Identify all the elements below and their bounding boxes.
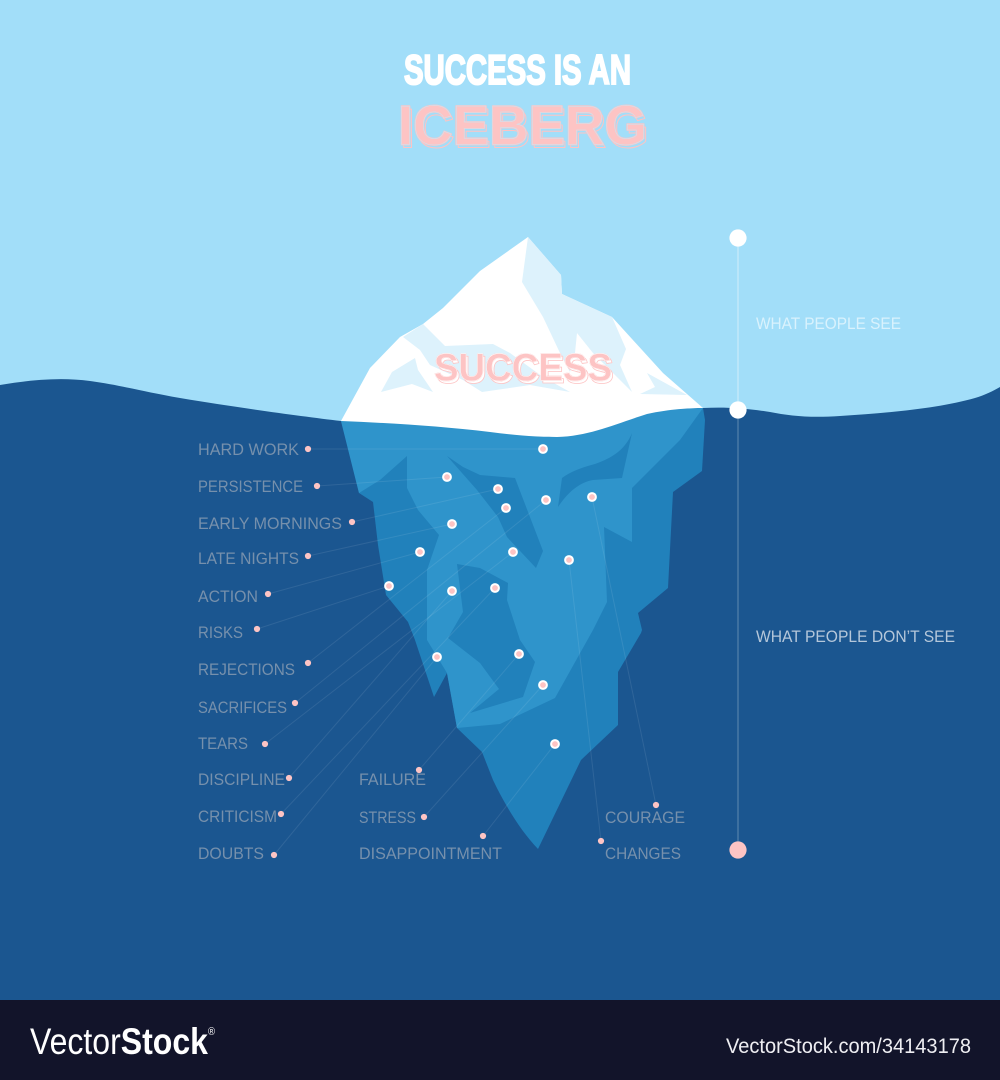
labels middle column: FAILURE — [359, 771, 426, 789]
labels left column — [198, 441, 342, 863]
iceberg below water — [341, 408, 705, 849]
darker facets — [447, 433, 632, 713]
labels left column: CRITICISM — [198, 808, 277, 826]
sea — [0, 379, 1000, 1000]
footer logo: ® — [208, 1026, 215, 1038]
connector lines — [257, 449, 656, 855]
footer bar — [0, 1000, 1000, 1080]
labels left column: LATE NIGHTS — [198, 550, 299, 568]
success label: SUCCESS — [434, 346, 612, 390]
labels left column: RISKS — [198, 624, 243, 642]
labels left column: EARLY MORNINGS — [198, 515, 342, 533]
labels middle column: DISAPPOINTMENT — [359, 845, 502, 863]
labels left column: PERSISTENCE — [198, 478, 303, 496]
labels right column: CHANGES — [605, 845, 681, 863]
labels left column: HARD WORK — [198, 441, 299, 459]
footer url: VectorStock.com/34143178 — [726, 1035, 971, 1058]
labels left column: DISCIPLINE — [198, 771, 285, 789]
labels right column — [605, 809, 685, 863]
iceberg above water — [341, 237, 703, 437]
label markers — [254, 446, 659, 858]
title — [398, 46, 649, 160]
footer logo: VectorStock — [30, 1021, 222, 1062]
labels middle column: STRESS — [359, 809, 416, 827]
labels right column: COURAGE — [605, 809, 685, 827]
lighter facet — [341, 408, 703, 728]
labels middle column — [359, 771, 502, 863]
iceberg shading — [381, 237, 687, 395]
success label: SUCCESS — [436, 349, 614, 392]
title: SUCCESS IS AN — [404, 46, 631, 93]
title word: iceberg: ICEBERG — [398, 94, 647, 156]
labels left column: ACTION — [198, 588, 258, 606]
success label: SUCCESS — [434, 346, 612, 390]
visibility scale — [729, 229, 747, 859]
labels left column: SACRIFICES — [198, 699, 287, 717]
scale label: what people don't see: WHAT PEOPLE DON’T SEE — [756, 628, 955, 646]
title word: iceberg: ICEBERG — [400, 96, 649, 160]
labels left column: TEARS — [198, 735, 248, 753]
labels left column: REJECTIONS — [198, 661, 295, 679]
labels left column: DOUBTS — [198, 845, 264, 863]
markers on iceberg — [385, 445, 596, 748]
scale label: what people see: WHAT PEOPLE SEE — [756, 315, 901, 333]
title word: iceberg: ICEBERG — [398, 94, 647, 156]
